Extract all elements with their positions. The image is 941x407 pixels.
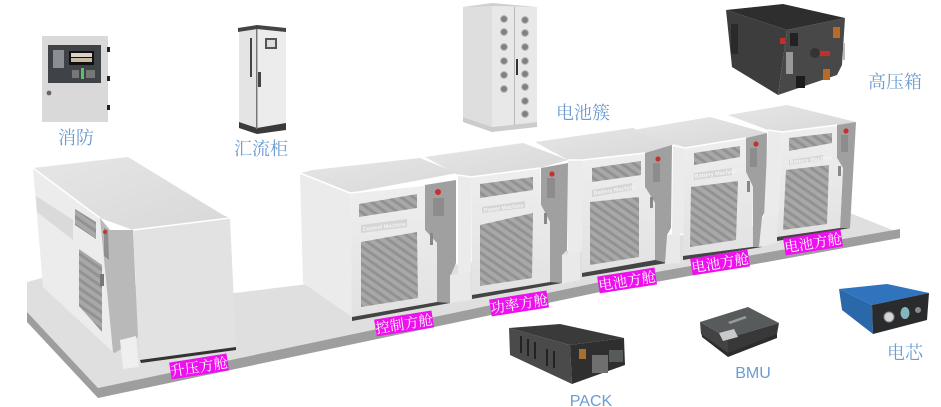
step-up cabin bbox=[33, 157, 236, 369]
control cabin: Control Machine bbox=[363, 222, 406, 233]
label: battery cabin 2: 电池方舱 bbox=[690, 249, 751, 276]
heading: high-voltage box: 高压箱 bbox=[868, 72, 922, 92]
icon: battery cell bbox=[839, 284, 929, 334]
heading: BMU: BMU bbox=[735, 365, 771, 382]
platform base bbox=[27, 213, 900, 398]
heading: fire control: 消防 bbox=[58, 128, 94, 148]
power cabin bbox=[425, 143, 580, 299]
icon: fire control panel bbox=[42, 36, 110, 122]
icon: BMU bbox=[700, 307, 779, 357]
icon: high-voltage box bbox=[726, 4, 845, 95]
label: power cabin: 功率方舱 bbox=[489, 291, 550, 317]
battery cabin 1: Battery Machine bbox=[593, 184, 636, 197]
label: battery cabin 3: 电池方舱 bbox=[783, 229, 844, 256]
label: step-up cabin: 升压方舱 bbox=[169, 354, 230, 380]
heading: combiner cabinet: 汇流柜 bbox=[234, 139, 288, 159]
control cabin bbox=[300, 158, 471, 321]
icon: battery cluster cabinet bbox=[463, 3, 537, 132]
icon: combiner cabinet bbox=[238, 25, 286, 134]
heading: battery cell: 电芯 bbox=[887, 343, 924, 363]
battery cabin 1 bbox=[535, 128, 680, 277]
heading: battery cluster: 电池簇 bbox=[556, 103, 610, 123]
label: battery cabin 1: 电池方舱 bbox=[597, 267, 658, 294]
battery cabin 3: Battery Machine bbox=[790, 155, 832, 166]
label: control cabin: 控制方舱 bbox=[374, 311, 435, 337]
battery cabin 3 bbox=[728, 105, 856, 241]
battery cabin 2 bbox=[633, 117, 778, 260]
icon: battery pack bbox=[509, 324, 625, 384]
power cabin: Power Machine bbox=[484, 203, 524, 214]
battery cabin 2: Battery Machine bbox=[695, 169, 737, 180]
